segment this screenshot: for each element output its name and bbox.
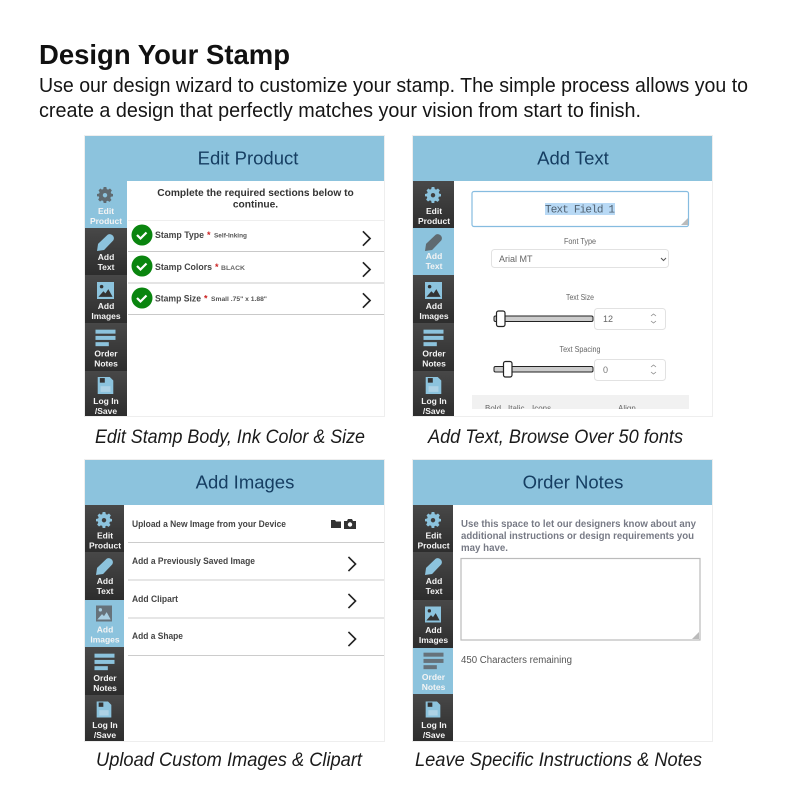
sidebar: order notes: Product xyxy=(417,540,450,550)
row: upload xyxy=(128,519,384,543)
sidebar: add images: Text xyxy=(97,586,114,596)
text size slider: 12 xyxy=(603,314,613,324)
text size slider: Text Size xyxy=(566,293,594,302)
row: stamp type: * xyxy=(207,230,211,240)
text spacing slider: 0 xyxy=(603,365,608,375)
notes textarea xyxy=(461,558,700,640)
panel: edit product xyxy=(84,136,384,416)
row: saved image xyxy=(128,556,384,580)
row: stamp size: * xyxy=(204,294,208,304)
sidebar: edit product: Product xyxy=(90,216,122,226)
row: stamp colors: * xyxy=(215,262,219,272)
sidebar: edit product: Images xyxy=(91,311,121,321)
sidebar: add images: /Save xyxy=(94,730,116,740)
text spacing slider xyxy=(494,345,666,380)
sidebar: order notes: Add xyxy=(425,625,442,635)
row: stamp colors xyxy=(128,256,384,284)
panel header: add text: Add Text xyxy=(537,148,609,168)
panel header: edit product xyxy=(85,136,384,181)
panel header: order notes xyxy=(413,460,712,505)
sidebar: edit product: Notes xyxy=(94,358,118,368)
sidebar: edit product: Add xyxy=(98,301,114,311)
text field: Text Field 1 xyxy=(545,204,615,216)
intro text: Use our design wizard to customize your stamp. The simple process allows you to xyxy=(39,75,748,97)
sidebar: add images: Add xyxy=(97,576,113,586)
sidebar: order notes xyxy=(413,505,453,741)
caption: add text: Add Text, Browse Over 50 fonts xyxy=(427,427,683,448)
panel header: add images: Add Images xyxy=(196,472,294,492)
sidebar: add images: Edit xyxy=(97,530,113,540)
order notes instructions: additional instructions or design requirements you xyxy=(461,531,694,542)
formatting bar: Italic xyxy=(508,404,524,413)
row: upload: Upload a New Image from your Device xyxy=(132,519,286,529)
sidebar: add text: Edit xyxy=(426,206,442,216)
panel header: edit product: Edit Product xyxy=(198,148,298,168)
row: stamp size: Small .75" x 1.88" xyxy=(211,296,267,303)
intro text xyxy=(39,75,748,122)
caption: add images: Upload Custom Images & Clipart xyxy=(96,750,363,771)
sidebar: order notes: Images xyxy=(419,635,448,645)
sidebar: order notes: Notes xyxy=(422,682,446,692)
sidebar: order notes: Text xyxy=(426,586,443,596)
title: Design Your Stamp xyxy=(39,39,290,70)
row: clipart: Add Clipart xyxy=(132,594,178,604)
sidebar: add images: Images xyxy=(90,634,120,644)
formatting bar xyxy=(472,395,689,409)
order notes instructions xyxy=(461,519,696,554)
sidebar: add images xyxy=(85,505,124,741)
sidebar: add text: Images xyxy=(419,311,449,321)
sidebar: add text: Order xyxy=(422,348,446,358)
panel: add text xyxy=(412,136,712,416)
sidebar: edit product: Order xyxy=(94,348,118,358)
intro text: create a design that perfectly matches your vision from start to finish. xyxy=(39,100,641,122)
font type select: Arial MT xyxy=(499,254,533,264)
sidebar: order notes: Log In xyxy=(421,720,447,730)
sidebar: add images: Order xyxy=(93,673,117,683)
sidebar: edit product: Log In xyxy=(93,396,119,406)
text spacing slider: Text Spacing xyxy=(560,345,600,354)
caption: order notes: Leave Specific Instructions & Notes xyxy=(415,750,702,771)
sidebar: add text: Notes xyxy=(422,358,446,368)
character counter: 450 Characters remaining xyxy=(461,655,572,666)
order notes instructions: may have. xyxy=(461,543,508,554)
sidebar: edit product: Text xyxy=(98,262,115,272)
sidebar: edit product: Add xyxy=(98,252,114,262)
sidebar: add text: /Save xyxy=(423,406,445,416)
instruction text: continue. xyxy=(233,200,278,210)
formatting bar: Icons xyxy=(532,404,551,413)
row: clipart xyxy=(128,594,384,618)
sidebar: add text: Add xyxy=(426,251,442,261)
instruction text xyxy=(157,188,354,210)
font type select: Font Type xyxy=(564,237,596,246)
sidebar: order notes: Add xyxy=(426,576,442,586)
sidebar: add images: Product xyxy=(89,540,121,550)
text field xyxy=(472,192,688,226)
sidebar: add text: Add xyxy=(426,301,442,311)
instruction text: Complete the required sections below to xyxy=(157,188,354,199)
panel header: order notes: Order Notes xyxy=(523,472,623,492)
panel: order notes xyxy=(412,460,712,742)
text size slider xyxy=(494,293,666,330)
row: stamp type: Self-Inking xyxy=(214,232,247,240)
sidebar: order notes: Order xyxy=(422,672,446,682)
row: stamp size xyxy=(128,288,384,315)
sidebar: add images: Log In xyxy=(92,720,118,730)
row: stamp size: Stamp Size xyxy=(155,294,201,304)
row: shape xyxy=(128,631,384,656)
row: stamp colors: BLACK xyxy=(221,265,245,272)
row: shape: Add a Shape xyxy=(132,631,183,641)
row: stamp type: Stamp Type xyxy=(155,230,204,241)
row: stamp type xyxy=(128,220,384,252)
panel header: add images xyxy=(85,460,384,505)
row: saved image: Add a Previously Saved Image xyxy=(132,556,255,566)
panel header: add text xyxy=(413,136,712,181)
sidebar: order notes: /Save xyxy=(423,730,445,740)
order notes instructions: Use this space to let our designers know about any xyxy=(461,519,696,530)
font type select xyxy=(492,237,668,268)
sidebar: add text: Text xyxy=(426,261,443,271)
sidebar: edit product xyxy=(85,181,127,416)
sidebar: add text: Product xyxy=(418,216,450,226)
sidebar: edit product: Edit xyxy=(98,206,114,216)
row: stamp colors: Stamp Colors xyxy=(155,262,212,273)
sidebar: add text xyxy=(413,181,454,416)
formatting bar: Bold xyxy=(485,404,501,413)
sidebar: add images: Notes xyxy=(93,683,117,693)
sidebar: add text: Log In xyxy=(421,396,447,406)
caption: edit product: Edit Stamp Body, Ink Color & Size xyxy=(95,427,365,448)
formatting bar: Align xyxy=(618,404,636,413)
sidebar: add images: Add xyxy=(97,624,113,634)
panel: add images xyxy=(84,460,384,742)
sidebar: order notes: Edit xyxy=(425,530,442,540)
sidebar: edit product: /Save xyxy=(95,406,117,416)
